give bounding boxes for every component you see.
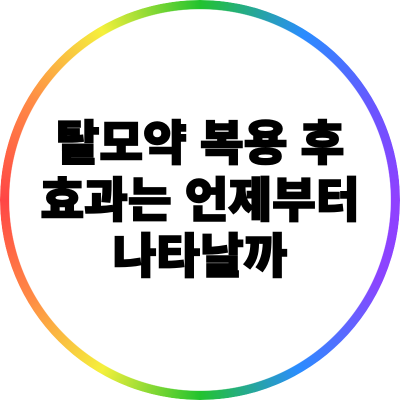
title: 나타날까 <box>113 231 287 284</box>
title: 효과는 언제부터 <box>40 174 360 228</box>
title <box>40 118 360 284</box>
title: 탈모약 복용 후 <box>56 118 344 171</box>
